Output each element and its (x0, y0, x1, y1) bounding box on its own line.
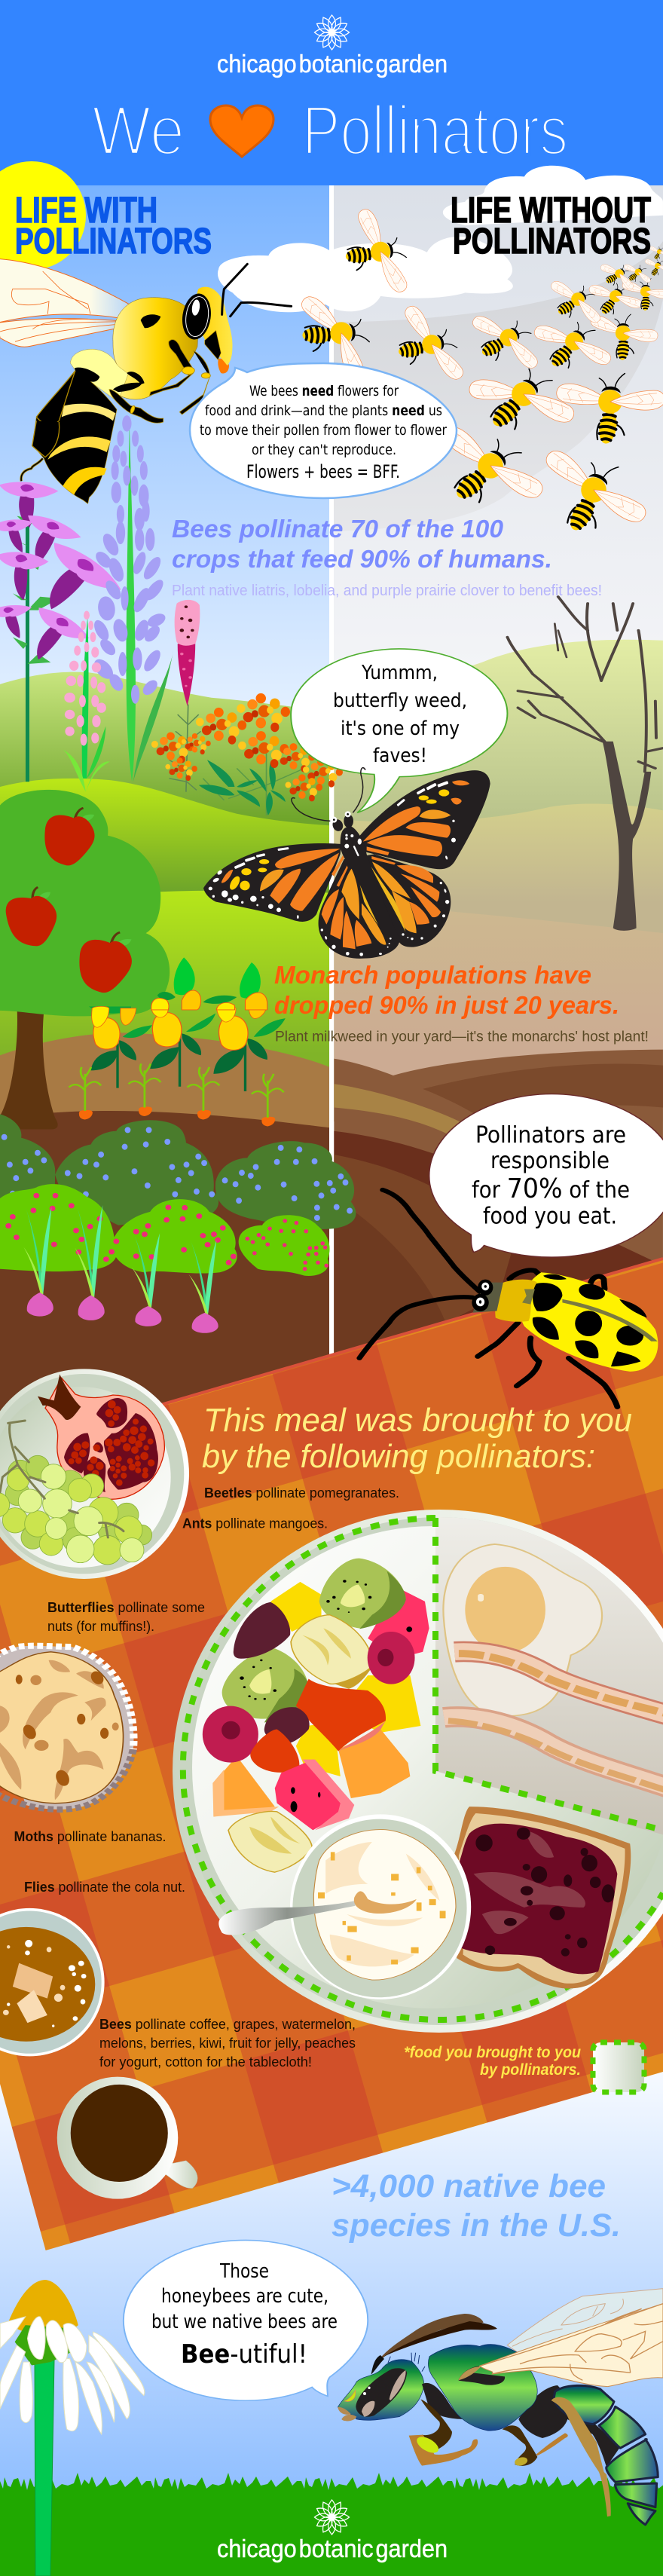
bee (439, 421, 546, 510)
legend note: *food you brought to you (404, 2044, 581, 2061)
muffin (0, 1646, 133, 1810)
panel: life with pollinators sky (0, 185, 329, 766)
speech bubble: bee: or they can't reproduce. (252, 442, 396, 458)
legend swatch (593, 2042, 644, 2092)
muffin paper wrapper (0, 1646, 133, 1810)
butterfly body (341, 827, 402, 944)
plum lower (264, 1707, 310, 1743)
stat: monarch populations: Monarch populations have (274, 961, 591, 989)
speech bubble: bee (190, 363, 457, 498)
big bee mouthparts (205, 330, 221, 359)
bee (623, 263, 652, 284)
native bee antennae (371, 2314, 484, 2374)
pollinator facts: Butterflies pollinate some (47, 1600, 205, 1615)
tip: plant milkweed: Plant milkweed in your yard—it's the monarchs' host plant! (275, 1029, 649, 1045)
plant: green pepper tips (151, 957, 267, 1010)
big bee thorax (109, 298, 198, 399)
bee (344, 207, 409, 295)
speech bubble: bee: to move their pollen from flower to flower (200, 422, 448, 439)
pollinator facts: Bees pollinate coffee, grapes, watermelon, (99, 2017, 356, 2032)
butterfly head and eyes (331, 811, 353, 833)
tree canopy (0, 790, 170, 1016)
kiwi bottom (222, 1648, 309, 1719)
bee (644, 258, 663, 277)
bee (542, 445, 649, 539)
background: blue header band (0, 0, 663, 186)
butterfly speech bubble (291, 649, 507, 812)
native bee hind leg (551, 2397, 611, 2516)
big bee head (197, 287, 233, 366)
cloud: centre (218, 237, 513, 312)
bee (555, 369, 663, 446)
butterfly speech bubble: Yummm, (361, 662, 438, 684)
speech bubble: bee: food and drink—and the plants need us (205, 402, 442, 419)
plant: lavender lupine (90, 415, 173, 782)
bee (470, 312, 540, 372)
speech bubble: bee: We bees need flowers for (249, 383, 399, 399)
pollinator facts: nuts (for muffins!). (47, 1619, 154, 1634)
native bee front wing (480, 2304, 663, 2387)
big bee wings (0, 259, 152, 347)
native bee back wing (507, 2289, 663, 2354)
beetle spots (533, 1274, 647, 1366)
legend note (404, 2044, 581, 2079)
pollinator facts: for yogurt, cotton for the tablecloth! (99, 2054, 312, 2070)
bee (600, 262, 634, 291)
butterfly yellow cells (228, 789, 449, 937)
legend note: by pollinators. (480, 2061, 581, 2079)
watermelon front (275, 1760, 353, 1830)
banana top (291, 1615, 373, 1684)
apple tree (0, 790, 170, 1129)
beetle antennae (359, 1190, 480, 1358)
beetle stripe (562, 1299, 658, 1342)
bacon strip (444, 1717, 663, 1797)
butterfly wings (203, 770, 490, 959)
native bee wing base (458, 2366, 505, 2385)
native bee head (338, 2360, 424, 2420)
beetle speech bubble (429, 1094, 663, 1257)
daisy stem (35, 2359, 54, 2576)
white centre divider (329, 185, 334, 1354)
left landscape: hills and soil (0, 672, 330, 1481)
kiwi top (319, 1559, 406, 1629)
fruit salad (203, 1559, 429, 1872)
stat: native bees (332, 2168, 621, 2244)
big bee rear thorax (70, 349, 128, 402)
native bee eye (356, 2368, 407, 2417)
stat: monarch populations (274, 961, 619, 1019)
bee (649, 245, 663, 261)
cantaloupe pieces (213, 1729, 410, 1817)
orange-red mango chunk (296, 1678, 386, 1751)
carrots (69, 1063, 284, 1126)
native bee mouthparts (338, 2407, 356, 2421)
speech bubble: bee: Flowers + bees = BFF. (246, 461, 400, 482)
coffee with cream bowl (0, 1908, 105, 2056)
checked picnic tablecloth (0, 1259, 663, 2250)
grapes (0, 1455, 152, 1565)
bee (588, 280, 643, 319)
stat: monarch populations: dropped 90% in just 20 years. (274, 991, 619, 1019)
native bee speech bubble (124, 2240, 368, 2400)
big bee wing joint (141, 314, 160, 328)
beetle speech bubble: Pollinators are (475, 1122, 626, 1149)
native bee legs (409, 2399, 568, 2467)
native green bee (338, 2289, 663, 2525)
beetle head (472, 1283, 503, 1313)
monarch butterfly (203, 768, 490, 959)
big bee abdomen (21, 371, 117, 503)
stat: native bees: species in the U.S. (332, 2207, 621, 2244)
native bee abdomen segments (554, 2385, 658, 2525)
pollinator facts (14, 1485, 399, 2070)
mango pieces (270, 1582, 420, 1733)
main breakfast plate (173, 1507, 663, 2033)
beetle speech bubble: food you eat. (483, 1203, 617, 1230)
cherry top (368, 1632, 415, 1684)
grey wedge of the bee swarm path (334, 241, 663, 531)
apple (44, 808, 95, 865)
daisy centre (8, 2280, 78, 2335)
heading: life with pollinators: LIFE WITH (15, 191, 157, 231)
icon: heart (210, 106, 273, 157)
dead tree (507, 597, 663, 931)
spotted cucumber beetle (359, 1190, 658, 1407)
stat: native bees: >4,000 native bee (332, 2168, 606, 2204)
sun (0, 161, 86, 270)
native bee dark waist (518, 2385, 620, 2467)
pollinator facts: Flies pollinate the cola nut. (24, 1880, 185, 1895)
dark plum top (234, 1602, 290, 1659)
native bee speech bubble: Bee-utiful! (181, 2339, 307, 2369)
stat: bees pollinate: Bees pollinate 70 of the 100 (172, 515, 504, 543)
green calyx leaves (13, 503, 60, 664)
grape stem (0, 1421, 124, 1537)
plant: purple penstemon (0, 482, 130, 782)
panel: life without pollinators sky (334, 185, 663, 766)
heading: this meal was brought to you: by the following pollinators: (202, 1438, 595, 1475)
stat: bees pollinate: crops that feed 90% of humans. (172, 545, 552, 573)
bee (549, 278, 602, 326)
native bee wing veins (480, 2304, 663, 2380)
banana lower (228, 1811, 312, 1872)
butterfly amber cells (260, 809, 451, 945)
pollinator dashed border (183, 1518, 663, 2020)
beetle eyes (472, 1280, 493, 1311)
cherry lower (203, 1706, 258, 1763)
native bee hairs (388, 2353, 425, 2372)
pollinator facts: Beetles pollinate pomegranates. (204, 1485, 399, 1501)
butterfly speech bubble: it's one of my (341, 717, 460, 740)
native bee speech bubble: but we native bees are (151, 2311, 338, 2333)
stat: bees pollinate (172, 515, 552, 573)
coffee cup (57, 2077, 197, 2199)
pomegranate (38, 1374, 164, 1499)
bushes with blue berries (0, 1114, 356, 1229)
swarm of honeybees (298, 207, 663, 539)
apple (0, 886, 64, 950)
watermelon back (368, 1589, 429, 1659)
bee (533, 317, 613, 374)
beetle pronotum (495, 1280, 537, 1322)
big bee eye (179, 292, 214, 341)
title (92, 91, 568, 170)
logo: footer wordmark: chicago botanic garden (217, 2535, 448, 2562)
logo wordmark: chicago botanic garden (217, 50, 448, 78)
faded egg-and-bacon section (435, 1507, 663, 1839)
bushes with pink berries (0, 1184, 330, 1276)
pollinator facts: melons, berries, kiwi, fruit for jelly, peaches (99, 2036, 356, 2051)
butterfly speech bubble: butterfly weed, (333, 690, 467, 712)
pollinator facts: Moths pollinate bananas. (14, 1829, 166, 1844)
yogurt bowl with spoon (218, 1814, 471, 1999)
big honeybee (0, 259, 292, 503)
butterfly orange wing cells (222, 780, 469, 949)
beetle speech bubble: for 70% of the (472, 1173, 630, 1204)
pollinator facts: Ants pollinate mangoes. (182, 1516, 328, 1531)
plant: butterfly weed (151, 693, 343, 815)
daisy petals (0, 2317, 145, 2434)
plant: liatris (169, 600, 201, 792)
bee (622, 277, 663, 311)
native bee speech bubble: Those (219, 2260, 269, 2283)
side plate (0, 1369, 189, 1579)
logo: footer flower mark (315, 2500, 350, 2535)
grass (0, 2472, 663, 2576)
big bee tongue (218, 359, 229, 374)
bacon strip (454, 1651, 663, 1718)
bee (298, 292, 369, 383)
tip: plant native flowers: Plant native liatris, lobelia, and purple prairie clover to benefit bees! (172, 583, 602, 599)
big bee marks and legs (75, 340, 210, 423)
butterfly white spots (209, 781, 456, 956)
pineapple (296, 1723, 341, 1776)
title: Pollinators (302, 91, 568, 170)
heading: this meal was brought to you (202, 1402, 632, 1475)
apple (79, 932, 132, 993)
heading: this meal was brought to you: This meal was brought to you (203, 1402, 632, 1439)
cloud: top right (443, 166, 663, 225)
toast with jelly (454, 1807, 631, 1988)
right landscape: barren hills and brown furrows (334, 640, 663, 1380)
daisy (0, 2280, 145, 2576)
bee (396, 303, 466, 383)
heading: life without pollinators (451, 191, 651, 262)
plant: yellow pepper plants (89, 1006, 286, 1091)
big bee antennae (222, 264, 292, 317)
native bee dark neck (422, 2383, 465, 2419)
beetle elytra (520, 1272, 658, 1372)
butterfly antennae (292, 768, 365, 821)
bottom sky (0, 2035, 663, 2495)
logo: flower mark (315, 15, 350, 50)
title: We (92, 91, 185, 170)
butterfly speech bubble: faves! (373, 745, 427, 767)
native bee simple eye (344, 2391, 356, 2401)
small plate: pomegranate and grapes (0, 1369, 189, 1579)
heading: life with pollinators: POLLINATORS (15, 222, 212, 262)
beetle legs (478, 1270, 617, 1407)
bee (468, 363, 577, 437)
spoon (218, 1901, 355, 1935)
heading: life with pollinators (15, 191, 212, 262)
native bee speech bubble: honeybees are cute, (161, 2285, 328, 2308)
native bee thorax (428, 2345, 537, 2431)
onions (23, 1205, 218, 1333)
beetle speech bubble: responsible (490, 1148, 610, 1174)
plant: pink lupine (63, 611, 110, 792)
bee (588, 312, 658, 361)
red berry (250, 1729, 299, 1773)
